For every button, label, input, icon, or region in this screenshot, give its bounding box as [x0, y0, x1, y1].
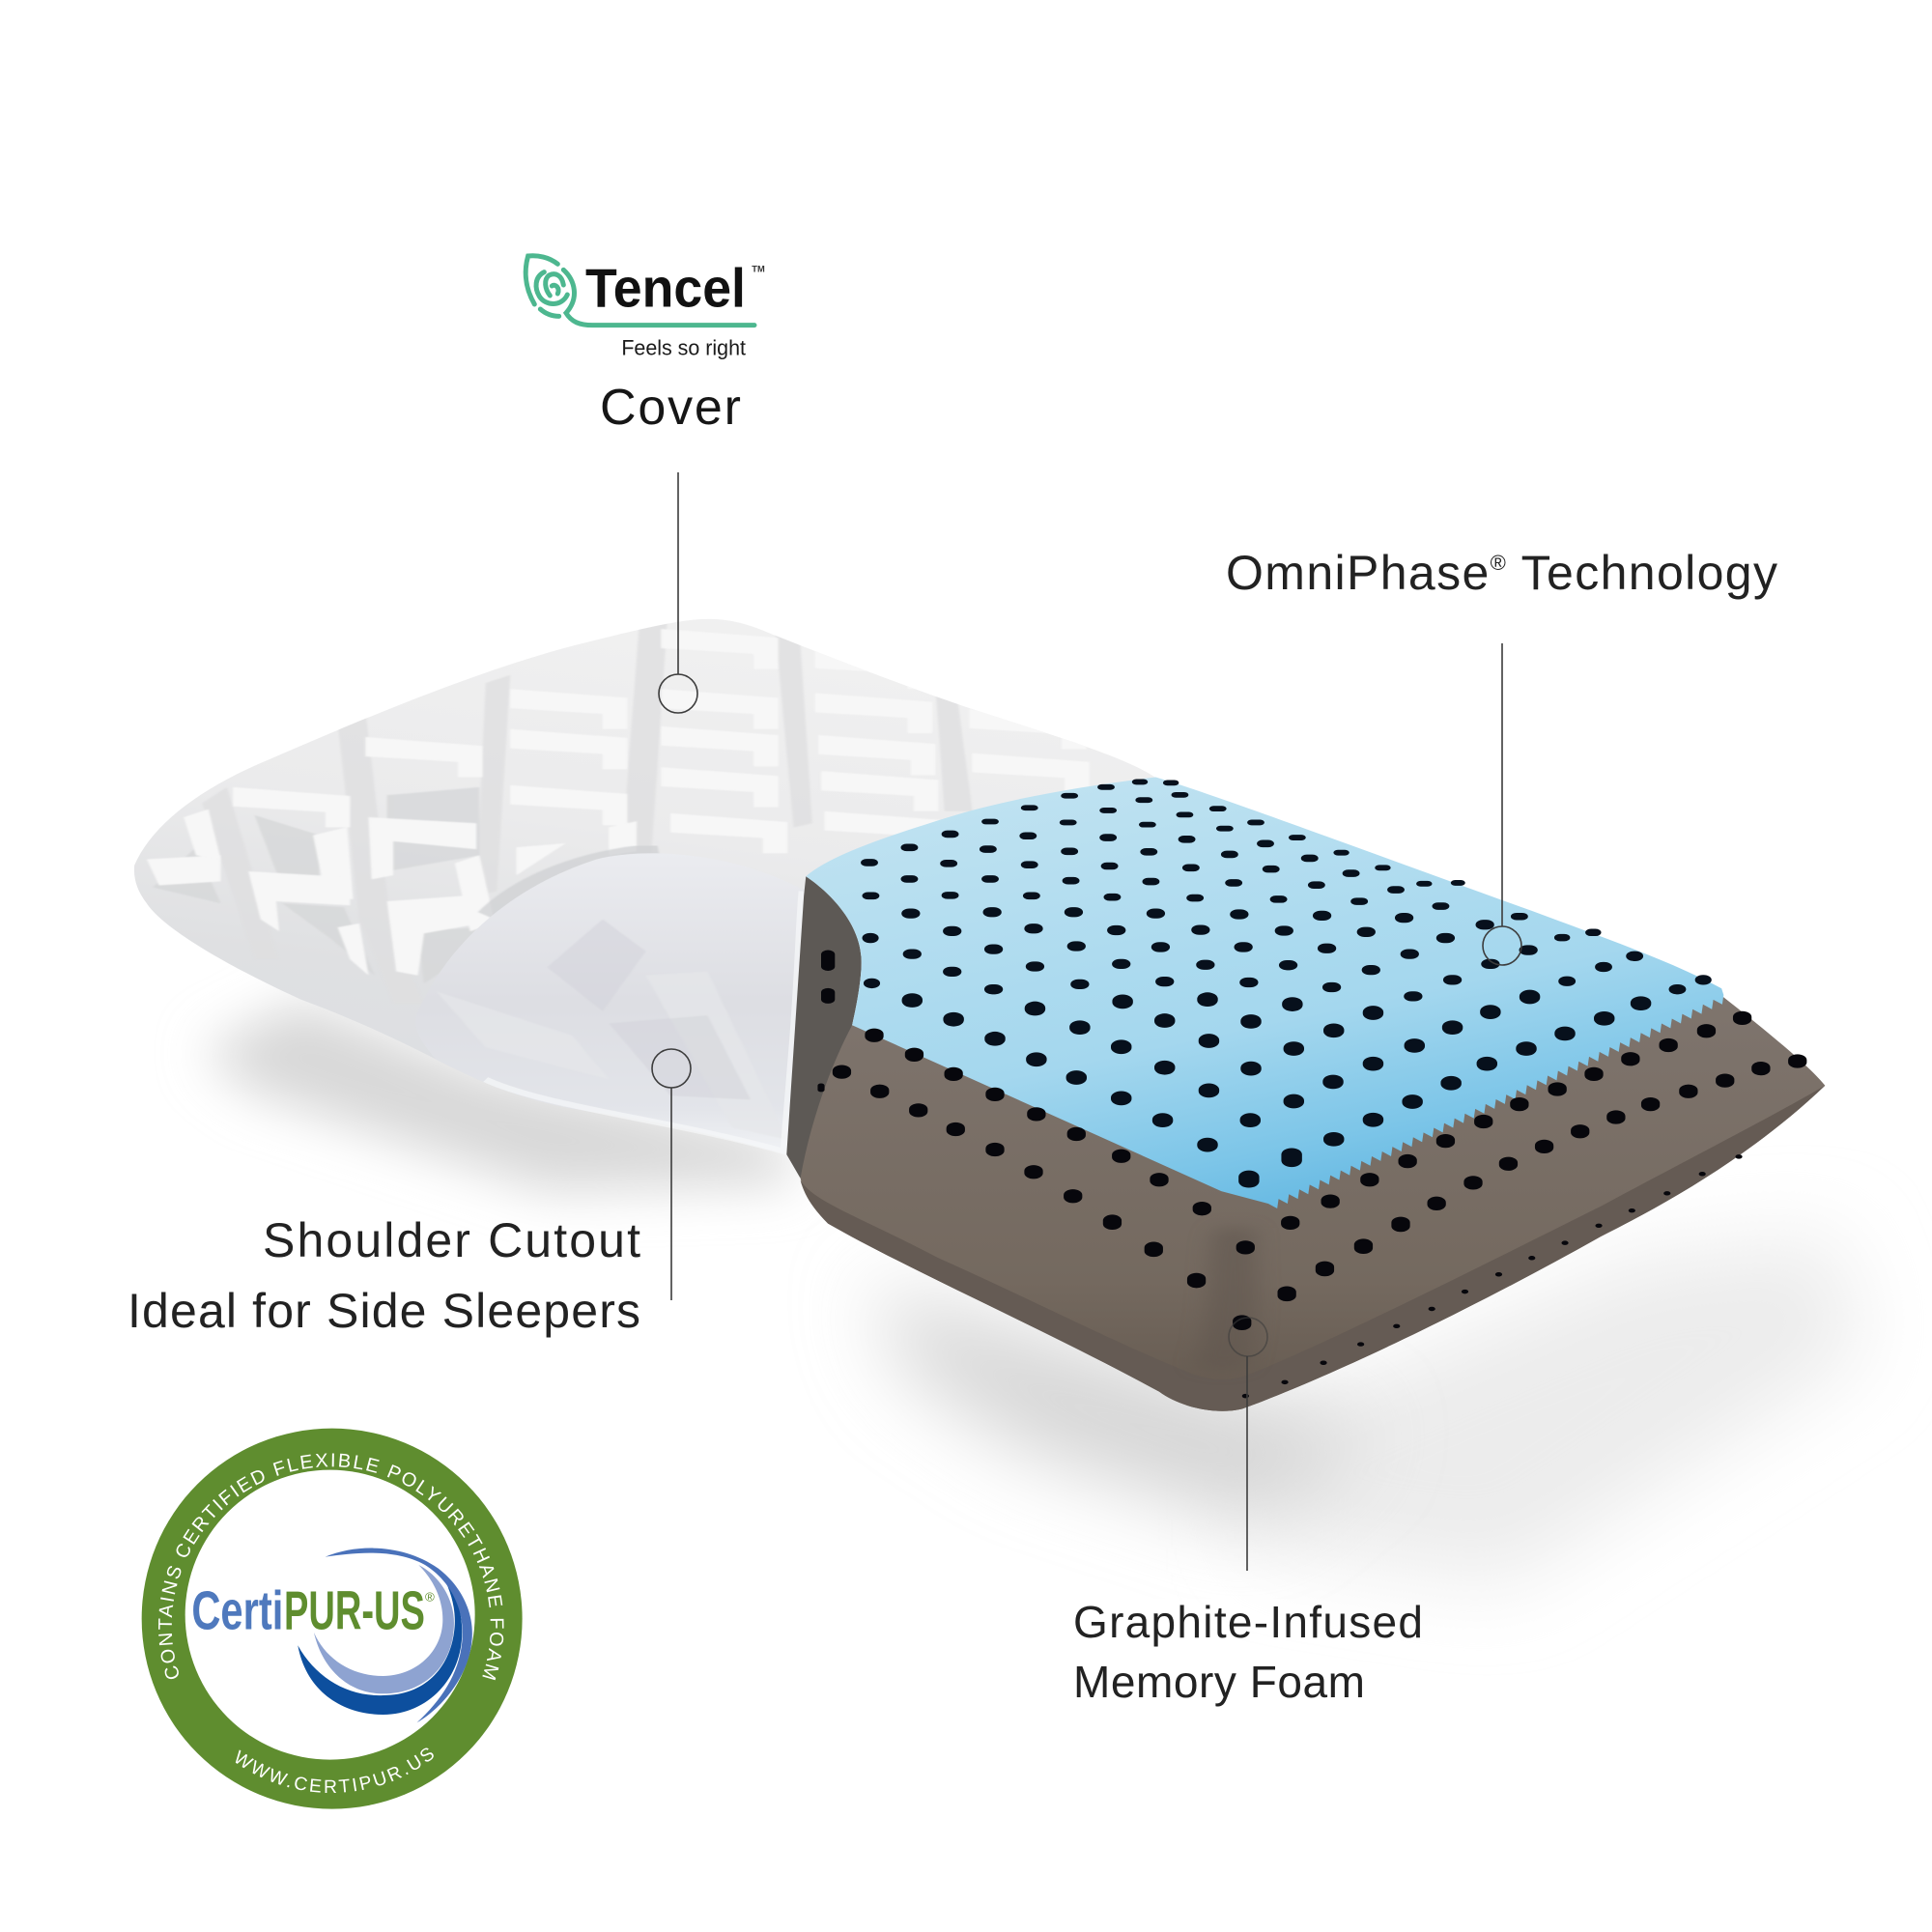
shoulder cutout dome — [415, 853, 814, 1153]
label: Cover: Cover — [600, 380, 741, 436]
badge: CertiPUR-US seal: WWW.CERTIPUR.US — [236, 1748, 434, 1793]
foam: perforation holes on blue top — [867, 781, 1704, 1181]
foam: dark side slab — [786, 876, 862, 1179]
callout: graphite foam line and marker — [1229, 1318, 1267, 1571]
text: trademark: TM — [752, 265, 765, 274]
foam: blue gel top — [806, 778, 1723, 1208]
text: tagline: Feels so right — [621, 335, 746, 359]
label: OmniPhase Technology: OmniPhase — [1226, 546, 1489, 600]
label: OmniPhase Technology: Technology — [1507, 546, 1777, 600]
icon: Tencel leaf — [526, 256, 754, 326]
badge: CertiPUR-US seal — [141, 1428, 523, 1809]
ground shadow: right darker — [869, 1285, 1372, 1526]
callout: cover line and marker — [659, 472, 697, 713]
label: OmniPhase Technology: ® — [1491, 551, 1506, 575]
label: Shoulder Cutout: Shoulder Cutout — [263, 1213, 640, 1267]
foam: corner ridge shade — [1194, 1228, 1258, 1371]
label: Graphite-Infused: Graphite-Infused — [1073, 1597, 1423, 1647]
badge: registered mark: ® — [425, 1589, 435, 1604]
logo: Tencel — [526, 256, 765, 359]
ground shadow: left — [203, 1000, 793, 1190]
label: Memory Foam: Memory Foam — [1073, 1657, 1365, 1707]
badge: Certi: Certi — [191, 1581, 283, 1642]
text: Tencel wordmark: Tencel — [585, 258, 746, 319]
pillow cover — [116, 599, 1176, 1168]
foam: graphite body — [801, 982, 1825, 1411]
badge ring — [142, 1429, 523, 1809]
badge: curved bottom text — [233, 1754, 438, 1793]
badge: PUR-US: PUR-US — [284, 1581, 425, 1642]
callout: shoulder cutout line and marker — [652, 1049, 691, 1300]
foam: lower seam shade — [801, 1086, 1825, 1411]
label: Ideal for Side Sleepers: Ideal for Side Sleepers — [128, 1284, 640, 1338]
foam pillow core — [786, 778, 1825, 1411]
callout: omniphase line and marker — [1483, 643, 1521, 965]
foam: perforation holes on graphite faces — [821, 954, 1798, 1396]
badge: swirl — [298, 1548, 472, 1722]
badge: CertiPUR-US seal: CONTAINS CERTIFIED FLEXIBLE POLYURETHANE FOAM — [158, 1453, 504, 1681]
badge: curved top text — [172, 1466, 491, 1678]
shadow above cutout — [486, 849, 658, 916]
ground shadow: right lighter — [1256, 1236, 1864, 1584]
